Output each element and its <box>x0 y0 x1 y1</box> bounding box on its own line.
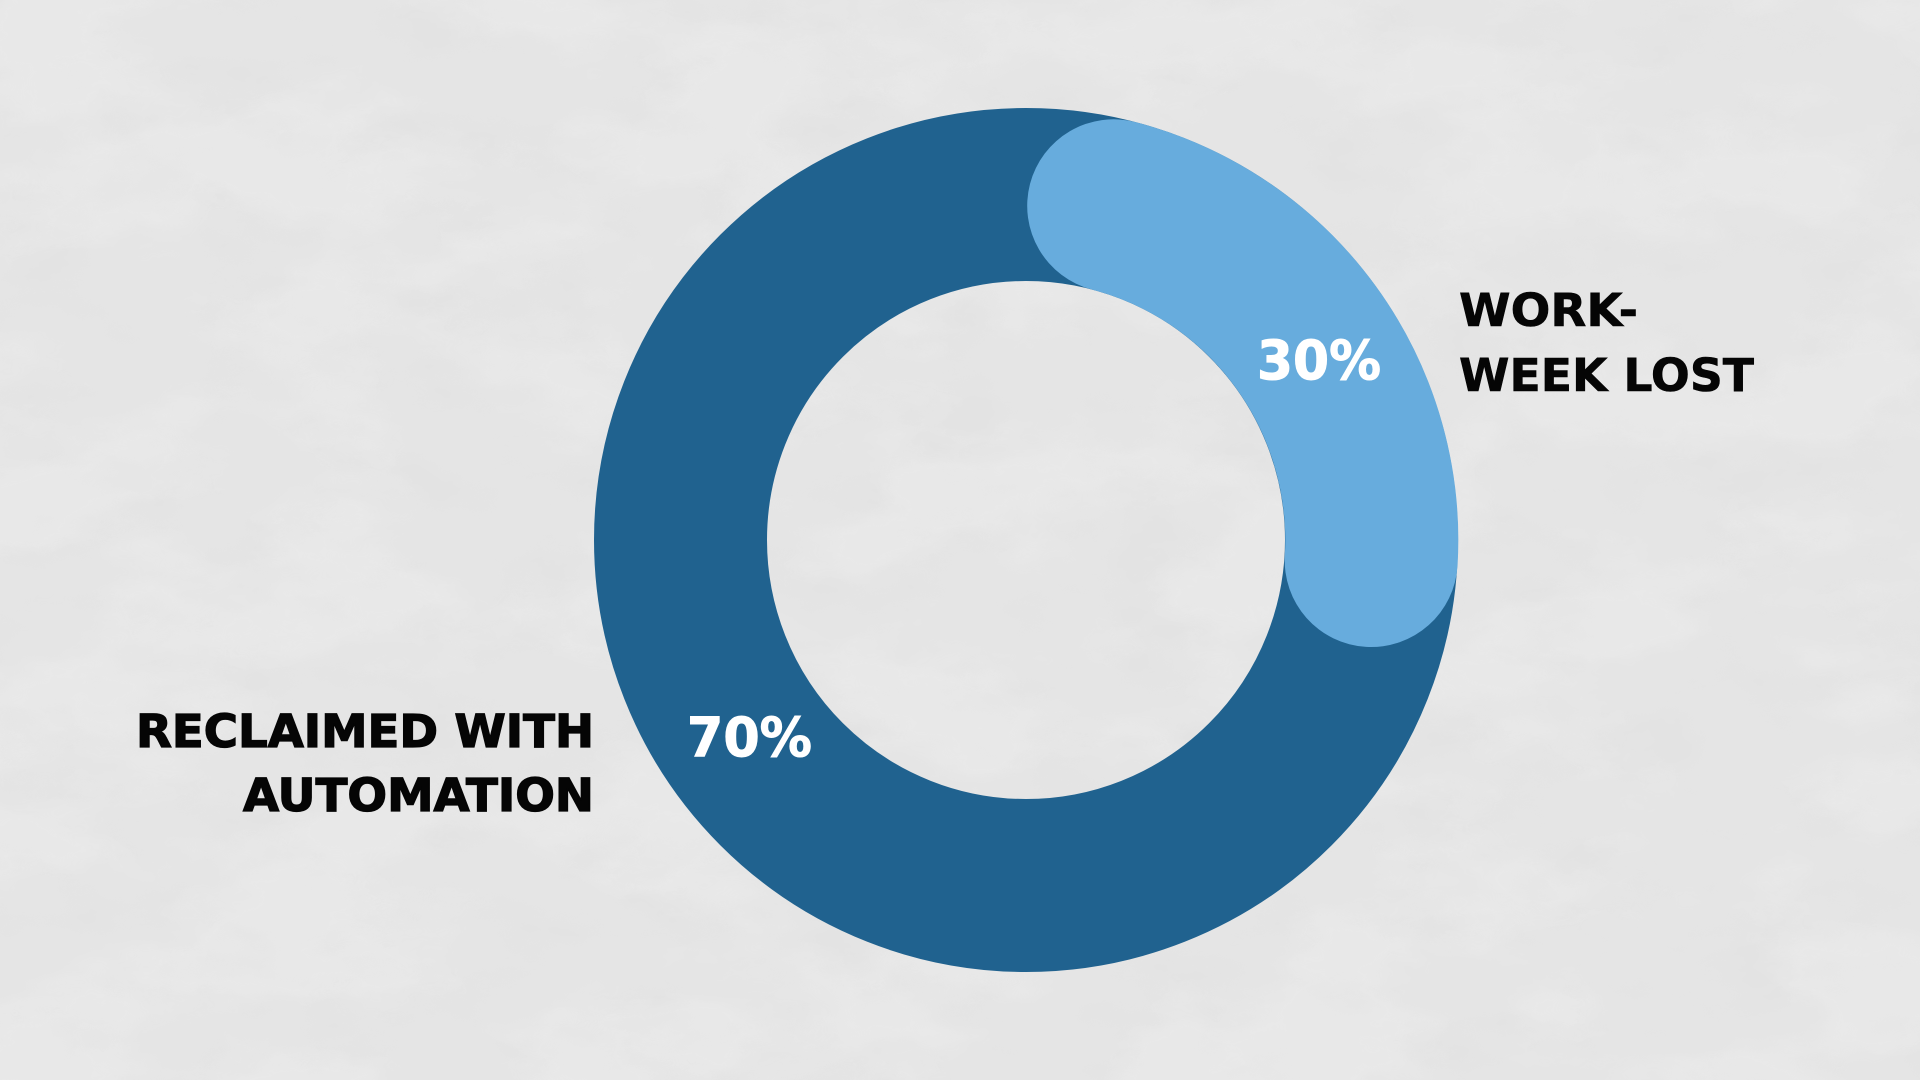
label: reclaimed with automation: RECLAIMED WITH <box>136 705 594 758</box>
label: reclaimed with automation: AUTOMATION <box>243 769 594 822</box>
label: work-week lost: WORK- <box>1459 284 1638 337</box>
donut segment: 70% reclaimed <box>680 194 1372 886</box>
donut segment: 30% lost <box>1114 206 1372 561</box>
donut chart <box>680 194 1381 886</box>
label: reclaimed with automation <box>136 705 594 822</box>
value: 30%: 30% <box>1257 329 1381 392</box>
label: work-week lost: WEEK LOST <box>1459 349 1754 402</box>
label: work-week lost <box>1459 284 1754 402</box>
value: 70%: 70% <box>687 706 812 769</box>
